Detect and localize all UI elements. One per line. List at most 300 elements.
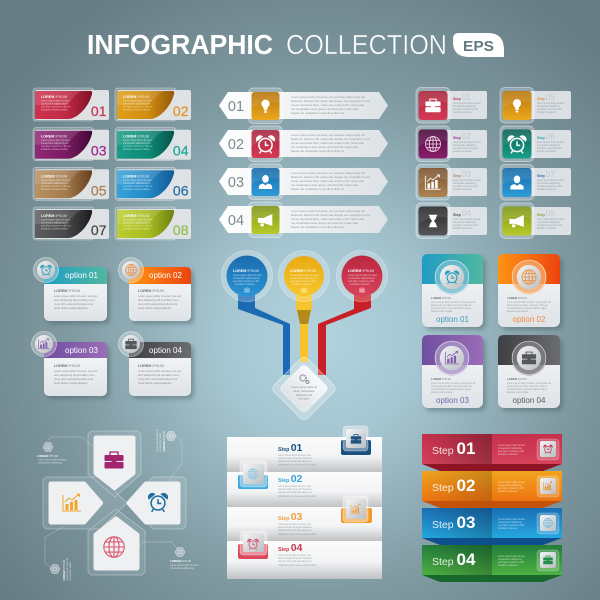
band step 04: Step 04 [432,550,476,569]
band step 01: Step 01 [432,439,475,458]
option 02 tall: option 02 [513,315,546,324]
step 02 text [278,473,316,498]
card 07: LOREM IPSUM [41,214,67,218]
step 08: sed diam nonummy nibh [537,225,563,227]
step 01: Step 01 [453,93,471,102]
step 07 [500,164,571,200]
band step 01: consectetur adipiscing [498,447,522,450]
band 04: 04 [228,213,244,229]
band step 01: tincidunt ut laoreet [498,453,518,456]
label: bottom left: LOREM IPSUM [62,559,66,581]
step 03 text: Step 03 [278,511,303,523]
diamond hub: sed diam [299,396,310,400]
step 03: consectetur adipiscing [453,182,476,185]
band 04: Datecum dolorem illo modo stae itaque tuo voluptatum eius [291,213,370,217]
badge: briefcase [341,426,371,455]
option 03 tall: LOREM IPSUM [431,377,451,381]
option 04: tetur adipiscing elit sed diam nonu [138,373,179,377]
label: top left: consectetur adipiscing [38,462,62,464]
band step 03: Lorem ipsum dolor sit am [498,518,525,521]
diamond hub: adipiscing elit [296,393,312,397]
step 06: Lorem ipsum dolor sit amet [537,141,565,144]
step 02 text: voluptatum eius neces una tibus illum [278,495,316,498]
step 04 text: dolorem illo modo stae itaque tuo [278,560,313,563]
option 03: option 03 [65,346,98,355]
card 05: Lorem ipsum dolor sit amet, [41,179,71,182]
option 02: oreet dolore magna aliquam [138,306,172,310]
band 04: itaque tuo voluptatum eius tibus illum sit [291,225,344,229]
band step 04: Lorem ipsum dolor sit am [498,555,525,558]
card 08: 08 [173,222,189,238]
step 01: consectetur adipiscing [453,105,476,108]
card 05: consectetur adipiscing elit [41,182,69,185]
band 01: neces una tibus illum, sitam iste ames in illo modo stae [291,103,364,107]
step 04 text: sectetur adip iscing elit. Datecum [278,557,312,560]
circle: red: sed diam nonummy nibh [348,280,375,283]
circle: red: Lorem ipsum dolor sit amet, [348,274,378,277]
circle: blue: Lorem ipsum dolor sit amet, [233,274,263,277]
step 02 text: dolorem illo modo stae itaque tuo [278,491,313,494]
band step 02: sed diam nonummy nibh [498,487,525,490]
step 02 [416,126,487,162]
panel: arrow bands 01-04 [219,88,388,238]
option 04 tall: ipiscing elit sed diam nonummy nibh eui [507,385,548,388]
card 06: LOREM IPSUM [123,174,149,178]
step 02: Lorem ipsum dolor sit amet [453,141,481,144]
card 01: sed diam nonummy nibh eu [41,106,71,108]
card 01: consectetur adipiscing elit [41,102,69,106]
option 01: tetur adipiscing elit sed diam nonu [54,298,95,302]
circle: red: LOREM IPSUM [348,269,374,273]
option 04: option 04 [149,346,182,355]
title: COLLECTION [286,29,447,60]
option 01: Lorem ipsum dolor sit amet, con sec [54,294,98,298]
card 07: tincidunt ut laoreet dolore [41,228,69,230]
step 02: tincidunt ut laoreet [453,150,472,153]
band 03 [219,164,388,200]
step 01: tincidunt ut laoreet [453,111,472,114]
step 05: consectetur adipiscing [537,105,560,108]
card 01: LOREM IPSUM [41,95,67,99]
label: bottom right [170,548,199,570]
circle: blue: LOREM IPSUM [233,269,259,273]
tile: briefcase [96,438,133,488]
tile: chart [51,484,100,522]
step 01 text: dolorem illo modo stae itaque tuo [278,460,313,463]
band 02: Lorem ipsum dolor sit amet, con sectetur adip iscing elit [291,133,365,137]
card 02: tincidunt ut laoreet dolore [123,108,151,112]
option 03 tall: Lorem ipsum dolor sit amet, consectetur ad [431,382,476,385]
card 08: tincidunt ut laoreet dolore [123,228,151,230]
step 01: sed diam nonummy nibh [453,109,479,111]
band 01: itaque tuo voluptatum eius tibus illum sit [291,111,344,115]
label: top right: consectetur adipis [159,432,162,452]
option 02: Lorem ipsum dolor sit amet, con sec [138,294,182,298]
option 02: tetur adipiscing elit sed diam nonu [138,298,179,302]
band 04: tuo voluptatum eius neces una tibus illo modo stae [291,221,359,225]
card 06: Lorem ipsum dolor sit amet, [123,179,153,182]
step 05: Step 05 [537,93,555,102]
band 02: Datecum dolorem illo modo stae itaque tuo voluptatum eius [291,137,370,141]
panel: option cards right [422,254,563,411]
option 02 tall: smod tincidunt ut laoreet dolore magna [507,307,547,310]
step 04: consectetur adipiscing [453,221,476,224]
step 08: tincidunt ut laoreet [537,227,556,230]
label: top left: Lorem ipsum dolor sit amet [38,458,67,462]
step 04: tincidunt ut laoreet [453,227,472,230]
title: INFOGRAPHIC [87,29,273,60]
step 02: Step 02 [453,132,471,141]
circle: yellow: consectetur adipiscing eli [290,277,317,280]
circle: blue: consectetur adipiscing eli [233,277,260,280]
step 03 text: voluptatum eius neces una tibus illum [278,533,316,536]
card 02: consectetur adipiscing elit [123,102,151,106]
card 02: LOREM IPSUM [123,95,149,99]
circle: yellow [278,250,330,302]
band step 03: Step 03 [432,513,475,532]
circle: red: consectetur adipiscing eli [348,277,375,280]
card 02: sed diam nonummy nibh eu [123,106,153,108]
band step 02 [422,471,562,508]
card 07: 07 [91,222,107,238]
band step 04: consectetur adipiscing [498,558,522,561]
card 07: Lorem ipsum dolor sit amet, [41,218,71,222]
card 07 [33,207,109,240]
card 05: sed diam nonummy nibh eu [41,185,71,188]
card 02: Lorem ipsum dolor sit amet, [123,100,153,102]
option 01 tall: aliquam erat volutpat [431,310,453,313]
label: bottom left: consectetur adipis [69,561,72,581]
option 02 tall: aliquam erat volutpat [507,310,529,313]
card 05: tincidunt ut laoreet dolore [41,188,69,191]
label: top left [37,443,67,464]
option 03: Lorem ipsum dolor sit amet, con sec [54,369,98,373]
circle: red: tincidunt ut laoreet [350,283,370,286]
diamond hub [271,355,337,422]
band step 02: tincidunt ut laoreet [498,490,518,493]
step 08: Lorem ipsum dolor sit amet [537,218,565,221]
band 01 [219,88,388,124]
option 02 tall: ipiscing elit sed diam nonummy nibh eui [507,304,548,307]
card 07: consectetur adipiscing elit [41,222,69,224]
card 06: 06 [173,182,189,198]
step 03 text: Lorem ipsum dolor sit amet, non [278,523,312,526]
card 04: LOREM IPSUM [123,135,149,139]
red ribbon [318,295,371,375]
diamond hub: amet, consectetur [293,389,315,393]
title [87,29,504,60]
band step 04: tincidunt ut laoreet [498,564,518,567]
label: top right [156,429,176,452]
step 04: sed diam nonummy nibh [453,225,479,227]
option 03 tall [422,335,486,411]
step 01 text: Lorem ipsum dolor sit amet, non [278,454,312,457]
step 05 [500,88,571,123]
band step 03 [422,508,562,545]
option 02 tall [498,254,563,330]
option 01 tall: Lorem ipsum dolor sit amet, consectetur ad [431,301,476,304]
circle: blue [222,250,272,302]
option 02 tall: Lorem ipsum dolor sit amet, consectetur ad [507,301,552,304]
band 03: Datecum dolorem illo modo stae itaque tuo voluptatum eius [291,175,370,179]
option 02: option 02 [149,271,182,280]
step 01 text: sectetur adip iscing elit. Datecum [278,457,312,460]
panel: cross diagram [37,429,199,581]
card 04: tincidunt ut laoreet dolore [123,148,151,151]
label: bottom right: consectetur adipiscing [170,567,194,570]
option 04 tall: Lorem ipsum dolor sit amet, consectetur ad [507,382,552,385]
option 04 tall: smod tincidunt ut laoreet dolore magna [507,388,547,391]
title: EPS [463,38,494,55]
option 04: Lorem ipsum dolor sit amet, con sec [138,369,182,373]
label: bottom left: Lorem ipsum dolor sit [66,558,69,581]
card 08: consectetur adipiscing elit [123,222,151,224]
option 03 tall: option 03 [436,396,470,405]
option 02 tall: LOREM IPSUM [507,296,527,300]
option 01 tall [422,254,486,330]
option 01: mmy nibh euismod tincidunt ut la [54,302,94,306]
step 06: consectetur adipiscing [537,144,560,147]
option 02 [118,258,194,324]
card 02 [115,88,191,121]
band 03: tuo voluptatum eius neces una tibus illo modo stae [291,183,359,187]
card 03: consectetur adipiscing elit [41,142,69,145]
band step 01: sed diam nonummy nibh [498,450,525,453]
step 01: Lorem ipsum dolor sit amet [453,102,481,105]
card 08: Lorem ipsum dolor sit amet, [123,218,153,222]
step 04 text: voluptatum eius neces una tibus illum [278,564,316,567]
band step 04 [422,545,562,582]
band step 02: Step 02 [432,476,475,495]
band step 01 [422,434,562,471]
band 04: Lorem ipsum dolor sit amet, con sectetur adip iscing elit [291,209,365,213]
card 03: sed diam nonummy nibh eu [41,145,71,148]
blue ribbon [238,295,290,375]
option 03 tall: aliquam erat volutpat [431,391,453,394]
step 07: sed diam nonummy nibh [537,186,563,188]
circle: yellow: Lorem ipsum dolor sit amet, [290,274,320,277]
option 03 tall: ipiscing elit sed diam nonummy nibh eui [431,385,472,388]
step 02: consectetur adipiscing [453,144,476,147]
card 06 [115,167,191,200]
step 04: Lorem ipsum dolor sit amet [453,218,481,221]
step 07: Lorem ipsum dolor sit amet [537,179,565,182]
step 03 [416,164,487,200]
step 08: consectetur adipiscing [537,221,560,224]
band step 01: Lorem ipsum dolor sit am [498,444,525,447]
card 04 [115,128,191,161]
badge: chart [341,496,372,523]
step 02: sed diam nonummy nibh [453,148,479,150]
step 01 [416,88,487,123]
card 05: 05 [91,182,107,198]
band 01: Lorem ipsum dolor sit amet, con sectetur adip iscing elit [291,95,365,99]
option 04 tall: aliquam erat volutpat [507,391,529,394]
card 04: 04 [173,143,189,159]
card 08: sed diam nonummy nibh eu [123,224,153,228]
card 01 [33,88,109,121]
card 03: LOREM IPSUM [41,135,67,139]
step 03: tincidunt ut laoreet [453,188,472,191]
glass frames [43,431,186,575]
circle: yellow: sed diam nonummy nibh [290,280,317,283]
label: top left: LOREM IPSUM [37,454,59,458]
connector lines [45,436,182,569]
option 01: oreet dolore magna aliquam [54,306,88,310]
card 03: tincidunt ut laoreet dolore [41,148,69,151]
badge: globe [238,461,268,489]
band 02: neces una tibus illum, sitam iste ames in illo modo stae [291,141,364,145]
band 02 [219,126,388,162]
band step 03: consectetur adipiscing [498,521,522,524]
step 05: tincidunt ut laoreet [537,111,556,114]
circle: yellow: tincidunt ut laoreet [292,283,312,286]
option 01 tall: smod tincidunt ut laoreet dolore magna [431,307,471,310]
option 04: oreet dolore magna aliquam [138,381,172,385]
step 06 [500,126,571,162]
step 07: tincidunt ut laoreet [537,188,556,191]
label: bottom left [50,558,72,581]
band 03: Lorem ipsum dolor sit amet, con sectetur adip iscing elit [291,171,365,175]
band 03: neces una tibus illum, sitam iste ames in illo modo stae [291,179,364,183]
option 04 tall: LOREM IPSUM [507,377,527,381]
step 03 text: sectetur adip iscing elit. Datecum [278,526,312,529]
band step 02: Lorem ipsum dolor sit am [498,481,525,484]
step 05: Lorem ipsum dolor sit amet [537,102,565,105]
card 08: LOREM IPSUM [123,214,149,218]
step 02 text: Step 02 [278,473,303,485]
band 04: neces una tibus illum, sitam iste ames in illo modo stae [291,217,364,221]
step 01 text: voluptatum eius neces una tibus illum [278,464,316,466]
card 06: consectetur adipiscing elit [123,182,151,185]
option 04 tall: option 04 [513,396,546,405]
panel: 3D step bands [422,434,562,582]
card 04: Lorem ipsum dolor sit amet, [123,139,153,142]
step 06: tincidunt ut laoreet [537,150,556,153]
panel: converging circles diagram [222,250,388,422]
step 07: Step 07 [537,170,555,179]
card 01: 01 [91,103,107,119]
panel: option cards left [32,258,194,399]
card 05: LOREM IPSUM [41,174,67,178]
option 01 tall: ipiscing elit sed diam nonummy nibh eui [431,304,472,307]
option 04: LOREM IPSUM [138,364,164,368]
step 04 [416,203,487,238]
option 03 tall: smod tincidunt ut laoreet dolore magna [431,388,471,391]
step 01 text: Step 01 [278,442,303,454]
step 07: consectetur adipiscing [537,182,560,185]
panel: numbered cards 01-08 [33,88,191,240]
card 08 [115,207,191,240]
circle: yellow: LOREM IPSUM [290,269,316,273]
card 01: tincidunt ut laoreet dolore [41,108,69,112]
band step 02: consectetur adipiscing [498,484,522,487]
option 01 tall: LOREM IPSUM [431,296,451,300]
label: bottom right: LOREM IPSUM [170,559,192,563]
label: top right: Lorem ipsum dolor sit [156,429,159,452]
option 04 [118,332,194,399]
option 03: tetur adipiscing elit sed diam nonu [54,373,95,377]
step 01 text [278,442,316,466]
circle: blue: sed diam nonummy nibh [233,280,260,283]
band 02: 02 [228,137,244,153]
step 04: Step 04 [453,209,471,218]
option 03 [32,332,110,399]
step 04 text: Lorem ipsum dolor sit amet, non [278,554,312,557]
option 04: mmy nibh euismod tincidunt ut la [138,377,178,381]
option 02: mmy nibh euismod tincidunt ut la [138,302,178,306]
card 01: Lorem ipsum dolor sit amet, [41,100,71,102]
option 01: LOREM IPSUM [54,289,80,293]
band 02: tuo voluptatum eius neces una tibus illo modo stae [291,145,359,149]
band step 03: tincidunt ut laoreet [498,527,518,530]
step 04 text [278,542,316,567]
option 03: oreet dolore magna aliquam [54,381,88,385]
card 03: 03 [91,143,107,159]
band 01: tuo voluptatum eius neces una tibus illo modo stae [291,107,359,111]
option 03: mmy nibh euismod tincidunt ut la [54,377,94,381]
band 01: Datecum dolorem illo modo stae itaque tuo voluptatum eius [291,99,370,103]
card 07: sed diam nonummy nibh eu [41,224,71,228]
step 08 [500,203,571,238]
label: bottom right: Lorem ipsum dolor sit amet [170,564,199,567]
option 01: option 01 [65,271,98,280]
band 03: itaque tuo voluptatum eius tibus illum sit [291,187,344,191]
step 03 text: dolorem illo modo stae itaque tuo [278,529,313,532]
step 03: Lorem ipsum dolor sit amet [453,179,481,182]
band backgrounds [227,437,382,579]
card 04: consectetur adipiscing elit [123,142,151,145]
step 04 text: Step 04 [278,542,303,554]
step 06: sed diam nonummy nibh [537,148,563,150]
option 04 tall [498,335,563,411]
band 01: 01 [228,99,244,115]
card 03: Lorem ipsum dolor sit amet, [41,139,71,142]
step 03: Step 03 [453,170,471,179]
panel: step list [227,426,382,579]
yellow ribbon [296,295,312,362]
card 06: tincidunt ut laoreet dolore [123,188,151,191]
tile: clock [129,484,178,522]
circle: blue: tincidunt ut laoreet [235,283,255,286]
card 03 [33,128,109,161]
step 02 text: sectetur adip iscing elit. Datecum [278,488,312,491]
option 03: LOREM IPSUM [54,364,80,368]
tile: globe [96,519,137,568]
card 02: 02 [173,103,189,119]
step 06: Step 06 [537,132,555,141]
card 06: sed diam nonummy nibh eu [123,185,153,188]
step 03: sed diam nonummy nibh [453,186,479,188]
band step 03: sed diam nonummy nibh [498,524,525,527]
band 02: itaque tuo voluptatum eius tibus illum sit [291,149,344,153]
panel: icon steps [416,88,571,238]
label: top right: LOREM IPSUM [162,430,166,452]
step 02 text: Lorem ipsum dolor sit amet, non [278,485,312,488]
option 01 tall: option 01 [436,315,470,324]
diamond hub: Lorem ipsum dolor sit [291,385,317,389]
option 02: LOREM IPSUM [138,289,164,293]
card 05 [33,167,109,200]
band 03: 03 [228,175,244,191]
badge: clock [238,531,268,559]
band 04 [219,202,388,238]
option 01 [34,258,110,324]
step 05: sed diam nonummy nibh [537,109,563,111]
step 08: Step 08 [537,209,555,218]
band step 04: sed diam nonummy nibh [498,561,525,564]
card 04: sed diam nonummy nibh eu [123,145,153,148]
